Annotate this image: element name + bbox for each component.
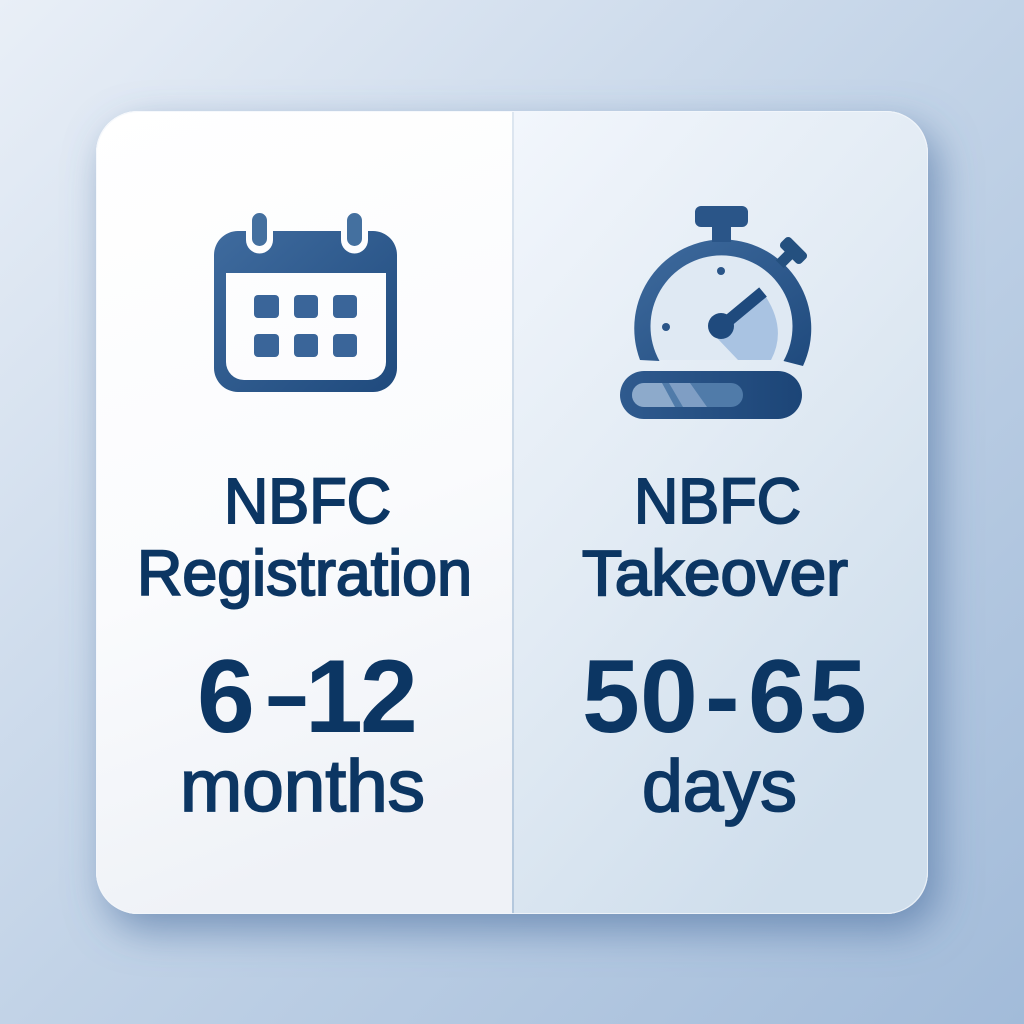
- value: 6–12 months: 1: [305, 639, 363, 755]
- heading: NBFC Takeover: Takeover: [582, 537, 848, 609]
- icon: stopwatch: [620, 206, 811, 419]
- value: 6–12 months: 6: [197, 639, 255, 755]
- value: 50-65 days: 50-65: [582, 639, 867, 755]
- panel: NBFC registration: [96, 111, 928, 914]
- heading: NBFC Takeover: [582, 465, 848, 609]
- card: [96, 111, 928, 914]
- value: 6–12 months: months: [180, 746, 425, 827]
- heading: NBFC Registration: NBFC: [224, 465, 391, 537]
- value: 6–12 months: 2: [360, 639, 418, 755]
- value: 50-65 days: days: [642, 746, 797, 827]
- heading: NBFC Takeover: NBFC: [634, 465, 801, 537]
- heading: NBFC Registration: Registration: [137, 537, 472, 609]
- heading: NBFC Registration: [137, 465, 472, 609]
- value: 6–12 months: [180, 639, 425, 827]
- icon: calendar: [214, 213, 397, 392]
- value: 6–12 months: –: [268, 658, 306, 734]
- value: 50-65 days: [582, 639, 867, 827]
- panel: NBFC takeover: [512, 111, 928, 914]
